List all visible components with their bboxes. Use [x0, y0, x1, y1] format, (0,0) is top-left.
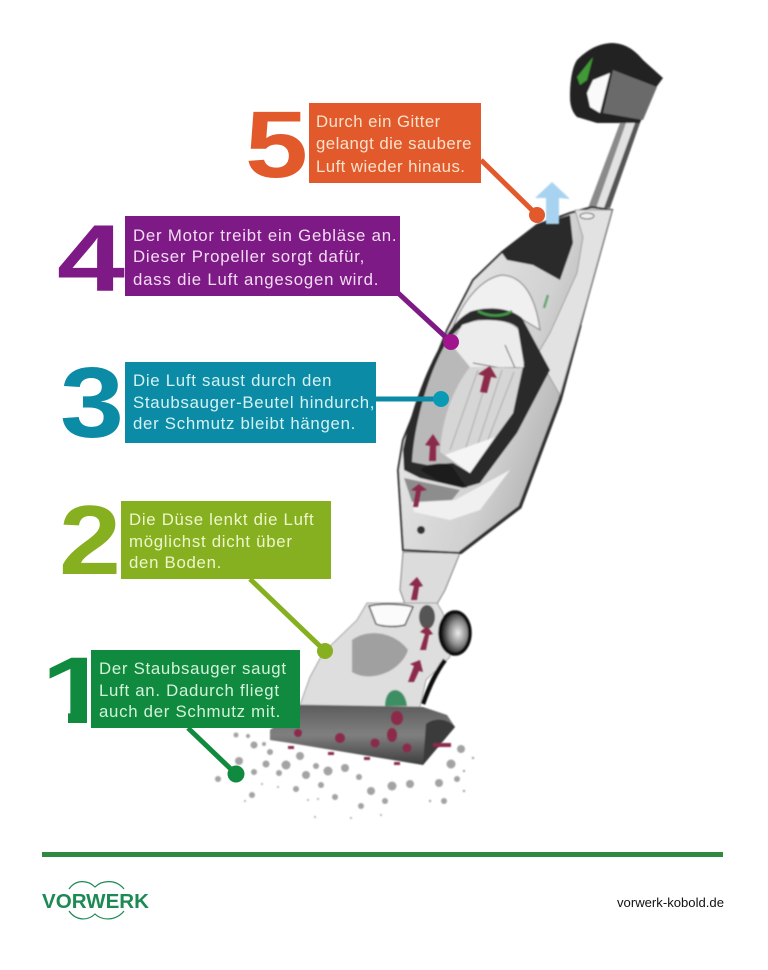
connector 3 — [376, 396, 441, 402]
roller opening — [423, 720, 455, 765]
callout text 5: Durch ein Gitter — [316, 112, 441, 131]
bag pleats — [450, 370, 514, 462]
lower body hole — [417, 526, 425, 534]
motor grille — [502, 215, 573, 280]
number 1: 1 — [41, 638, 111, 744]
floor roller — [270, 705, 455, 765]
lower bright band — [412, 470, 510, 520]
step 2 — [59, 485, 333, 659]
bag white corner — [445, 437, 495, 473]
body marking — [544, 295, 548, 308]
outer dark edge — [460, 325, 580, 553]
callout text 4: dass die Luft angesogen wird. — [133, 270, 379, 289]
logo wordmark: VORWERK — [42, 891, 150, 913]
vacuum body shell — [398, 207, 612, 553]
callout text 1: Luft an. Dadurch fliegt — [99, 681, 280, 700]
step 3 — [60, 347, 449, 459]
dark blob under window — [420, 464, 467, 488]
number 3: 3 — [60, 347, 124, 459]
callout text 1: auch der Schmutz mit. — [99, 702, 281, 721]
motor cracks — [473, 345, 520, 368]
motor area — [452, 320, 524, 367]
callout text 2: den Boden. — [129, 553, 222, 572]
number 5: 5 — [245, 92, 308, 198]
connector 2 — [250, 579, 325, 651]
green nozzle button — [385, 690, 407, 706]
callout box 5 — [309, 103, 481, 183]
blue exhaust arrow — [535, 182, 570, 224]
callout text 4: Der Motor treibt ein Gebläse an. — [133, 226, 397, 245]
dot 4 — [443, 334, 459, 350]
nozzle cover — [369, 604, 413, 627]
callout text 2: Die Düse lenkt die Luft — [129, 510, 314, 529]
dot 3 — [433, 391, 449, 407]
lower mechanism — [404, 478, 460, 502]
vacuum pole — [588, 123, 640, 208]
wheel — [440, 612, 470, 654]
step 4 — [57, 206, 459, 350]
callout text 1: Der Staubsauger saugt — [99, 659, 287, 678]
callout box 4 — [125, 216, 400, 296]
dot 5 — [529, 207, 545, 223]
dark window ring — [403, 308, 550, 488]
website url: vorwerk-kobold.de — [617, 896, 724, 910]
Vorwerk logo — [42, 882, 150, 919]
rear strip — [537, 210, 612, 395]
callout text 3: Die Luft saust durch den — [133, 371, 332, 390]
connector 1 — [188, 728, 236, 774]
footer divider — [42, 852, 723, 857]
callout box 3 — [125, 362, 376, 443]
callout box 1 — [91, 650, 300, 728]
green motor ring — [478, 311, 512, 316]
connector 4 — [397, 292, 451, 342]
logo arcs — [69, 882, 124, 919]
number 2: 2 — [59, 485, 121, 595]
pole collar — [580, 213, 594, 219]
callout box 2 — [121, 501, 331, 579]
airflow arrows — [288, 366, 497, 765]
callout text 5: Luft wieder hinaus. — [316, 157, 465, 176]
step 1 — [50, 650, 300, 782]
vacuum handle — [570, 43, 663, 123]
connector 5 — [481, 160, 537, 215]
nozzle head shading — [352, 633, 408, 676]
callout text 2: möglichst dicht über — [129, 532, 293, 551]
illustration: vacuum cleaner — [270, 43, 663, 765]
callout text 5: gelangt die saubere — [316, 134, 472, 153]
dot 2 — [317, 643, 333, 659]
window interior — [412, 320, 524, 473]
grey oval — [419, 605, 435, 629]
wheel arch — [423, 660, 445, 704]
dot 1 — [228, 766, 244, 782]
callout text 3: Staubsauger-Beutel hindurch, — [133, 393, 375, 412]
dust bag — [440, 367, 522, 473]
callout text 3: der Schmutz bleibt hängen. — [133, 414, 356, 433]
step 5 — [245, 92, 545, 223]
vacuum neck — [400, 552, 460, 604]
window arch — [450, 275, 540, 335]
nozzle head — [300, 603, 450, 707]
number 4: 4 — [57, 206, 125, 312]
callout text 4: Dieser Propeller sorgt dafür, — [133, 247, 365, 266]
dust particles — [215, 732, 474, 819]
